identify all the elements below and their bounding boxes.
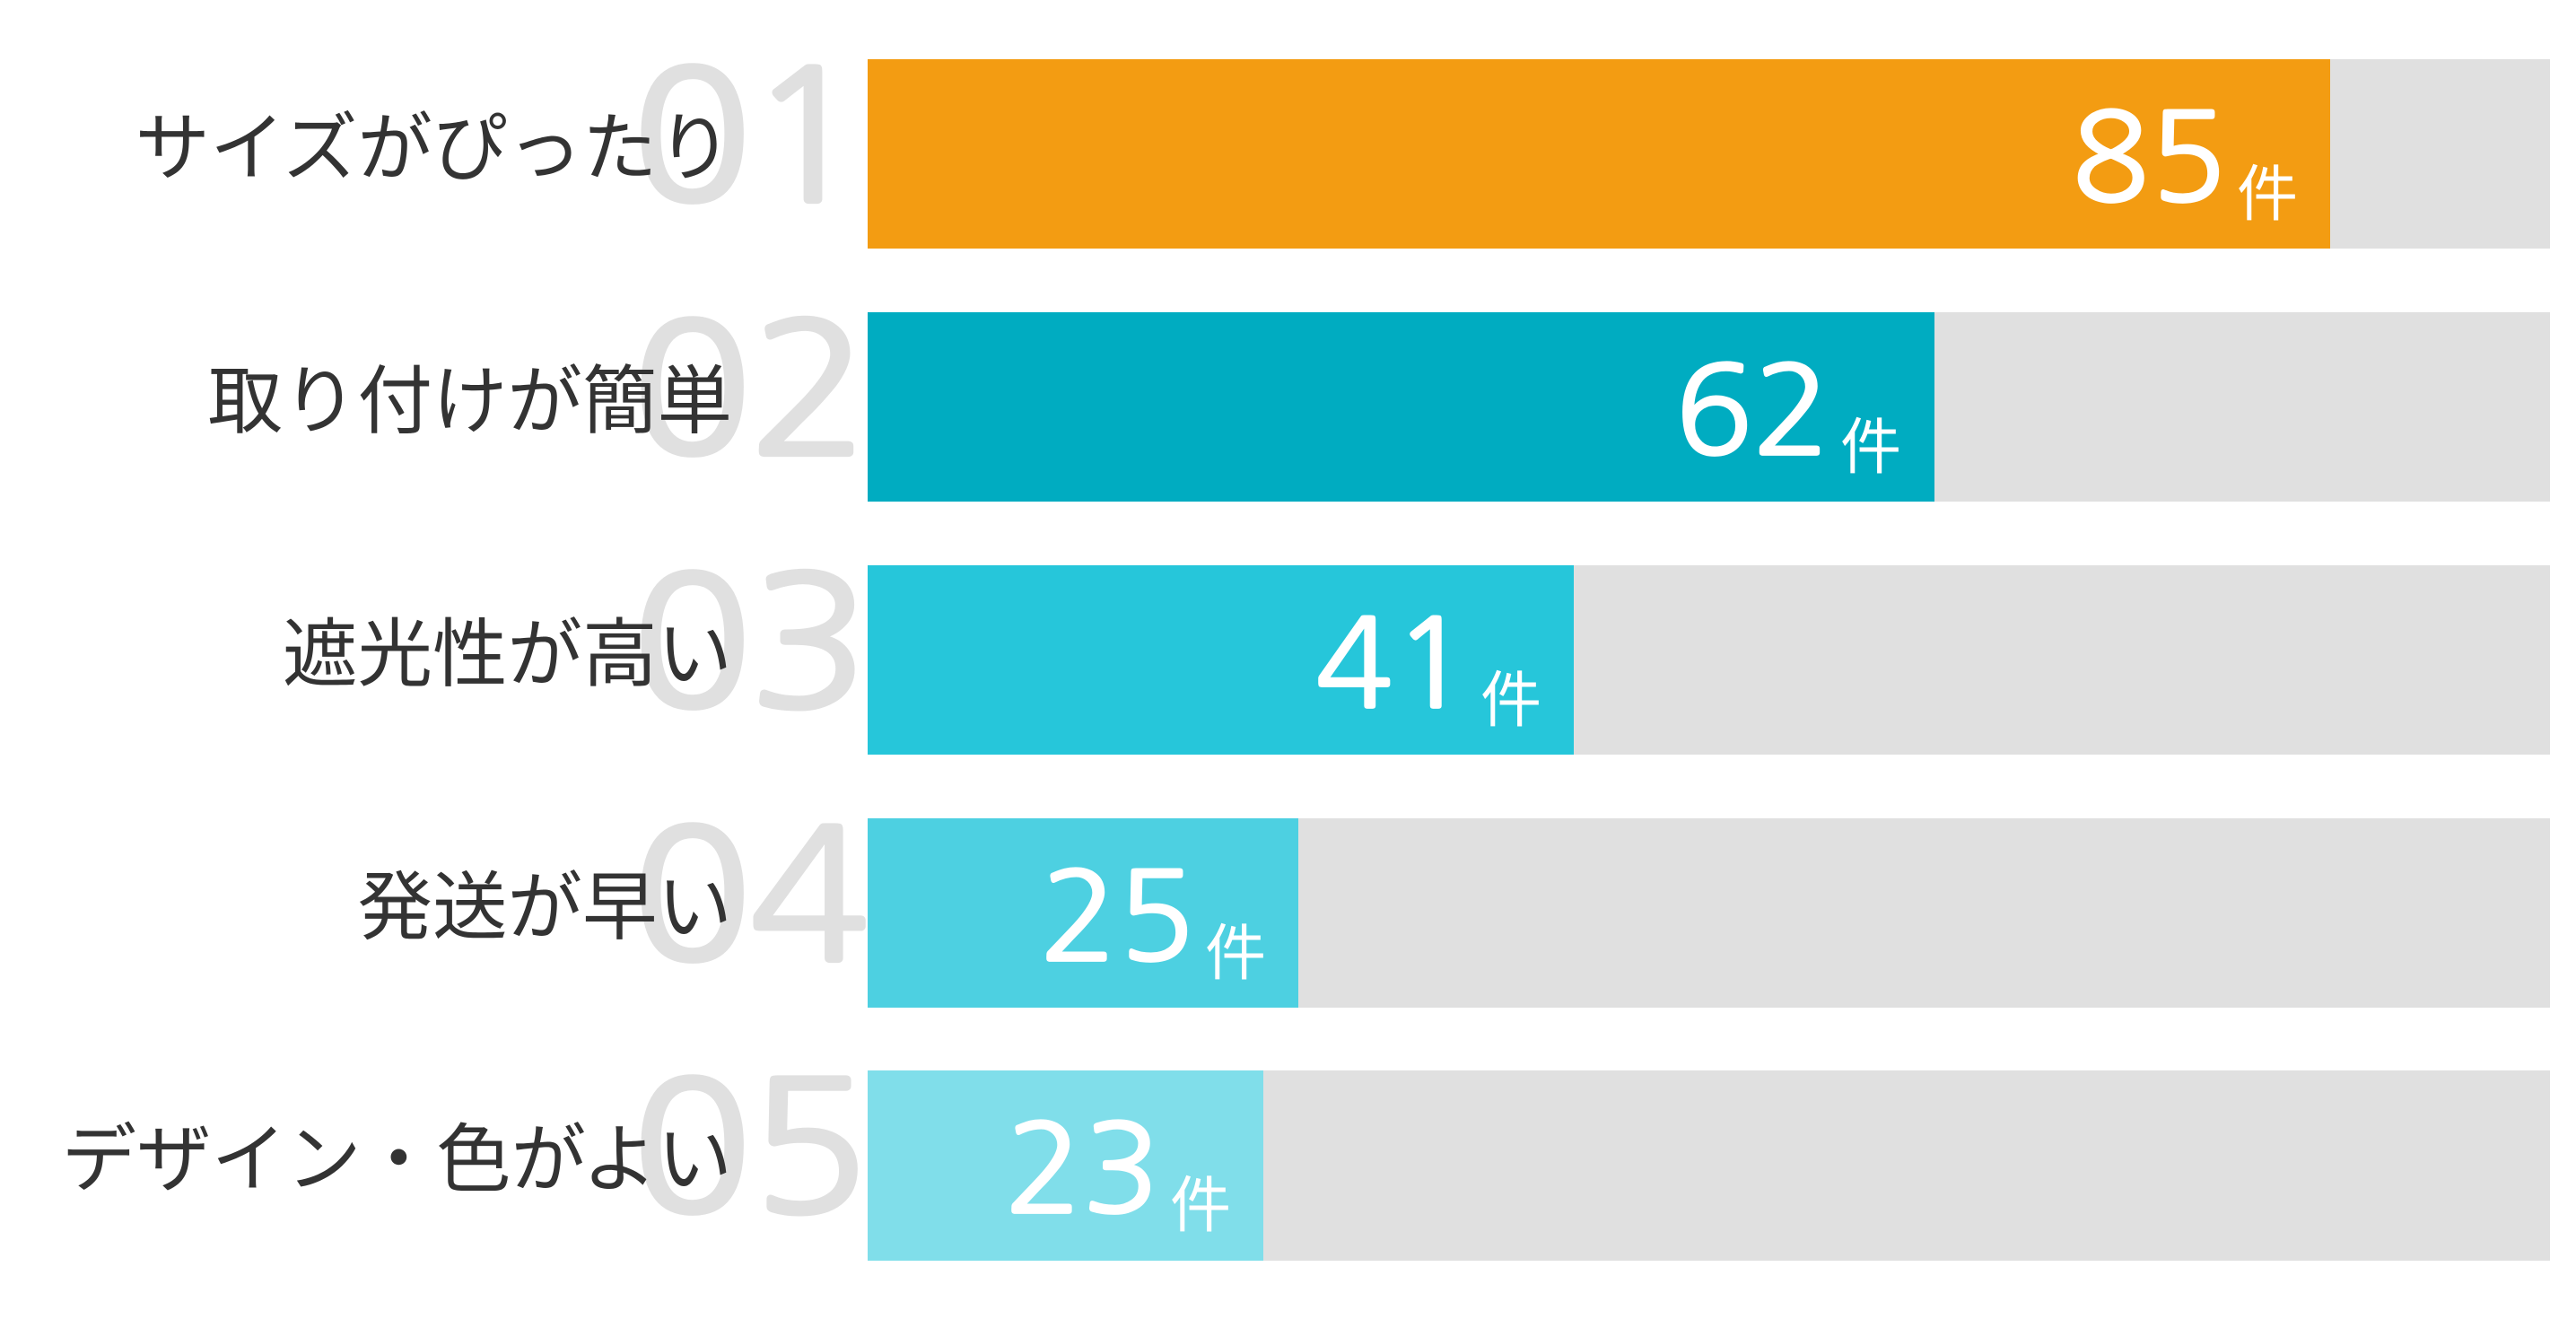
rank number 03: 3 (749, 552, 869, 733)
row 1: サイズがぴったり (135, 46, 2550, 249)
unit 5: 件 (1170, 1172, 1231, 1240)
track 2 (868, 312, 2550, 502)
rank number 05: 0 (632, 1057, 752, 1238)
rank number 01: 0 (632, 46, 752, 227)
bar 3 (868, 565, 1574, 755)
value 25: 25 (1040, 857, 1195, 978)
row 5: デザイン・色がよい (62, 1057, 2550, 1261)
label 2: 取り付けが簡単 (208, 359, 732, 443)
value 23: 23 (1005, 1109, 1160, 1230)
track 4 (868, 818, 2550, 1008)
track 3 (868, 565, 2550, 755)
row 3: 遮光性が高い (283, 552, 2550, 755)
rank number 04 (632, 805, 869, 986)
track 5 (868, 1070, 2550, 1261)
rank number 03 (632, 552, 869, 733)
rank number 04: 0 (632, 805, 752, 986)
rank number 05: 5 (749, 1057, 869, 1238)
rank number 04: 4 (749, 805, 869, 986)
unit 2: 件 (1840, 414, 1901, 482)
value 41: 41 (1315, 604, 1471, 725)
track 1 (868, 59, 2550, 249)
rank number 03: 0 (632, 552, 752, 733)
row 2: 取り付けが簡単 (208, 299, 2550, 502)
bar 4 (868, 818, 1298, 1008)
rank number 05 (632, 1057, 869, 1238)
label 3: 遮光性が高い (283, 612, 732, 696)
bar 5 (868, 1070, 1263, 1261)
label 5: デザイン・色がよい (62, 1117, 732, 1201)
rank number 02: 2 (749, 299, 869, 480)
bar 1 (868, 59, 2330, 249)
value 85: 85 (2072, 98, 2227, 219)
bar 2 (868, 312, 1934, 502)
unit 4: 件 (1205, 920, 1266, 988)
value 62: 62 (1675, 351, 1830, 472)
label 4: 発送が早い (357, 865, 732, 949)
label 1: サイズがぴったり (135, 106, 732, 190)
row 4: 発送が早い (357, 805, 2550, 1008)
rank number 02: 0 (632, 299, 752, 480)
rank number 01: 1 (747, 46, 867, 227)
rank number 02 (632, 299, 869, 480)
unit 3: 件 (1480, 667, 1541, 735)
unit 1: 件 (2237, 161, 2298, 229)
rank number 01 (632, 46, 867, 227)
